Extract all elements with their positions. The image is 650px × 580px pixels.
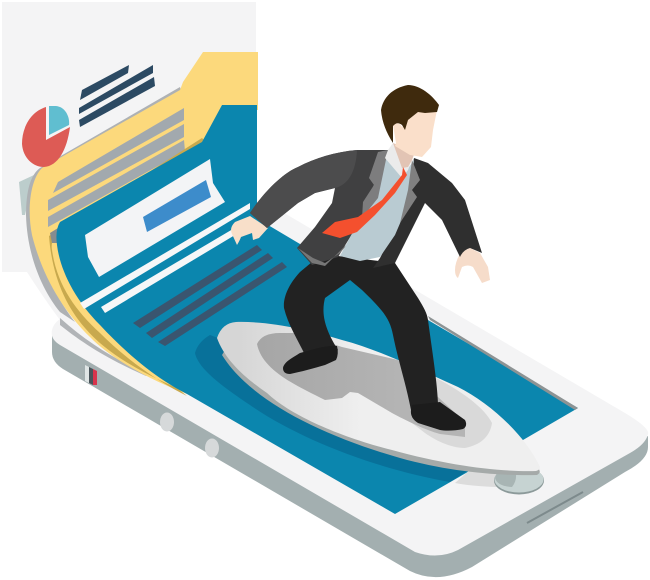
yellow folder	[30, 52, 256, 394]
blue button	[143, 180, 211, 232]
pie chart icon	[22, 106, 70, 167]
panel: light curled page sheet	[2, 2, 256, 396]
blue pie slice	[49, 106, 69, 135]
folder with yellow back	[19, 52, 258, 396]
board deck	[217, 322, 540, 471]
neck	[393, 143, 415, 168]
face	[395, 110, 437, 157]
collar	[385, 143, 412, 178]
right lapel	[400, 160, 420, 223]
dark bars on page	[133, 245, 287, 346]
hair	[381, 85, 439, 143]
grey inner screen edge	[428, 316, 578, 410]
phone side wall	[52, 335, 648, 577]
ear	[393, 123, 405, 145]
tie	[322, 167, 407, 238]
surfboard shadow on phone	[455, 468, 530, 487]
jacket left arm and body	[250, 150, 388, 265]
surfboard shadow on screen	[195, 335, 472, 482]
left hand	[231, 216, 268, 245]
red pie slice	[22, 107, 70, 167]
left lapel	[362, 150, 388, 218]
phone top surface	[52, 200, 648, 556]
left shoe	[283, 346, 338, 374]
businessman	[231, 85, 490, 431]
side button 1	[160, 412, 174, 432]
white lines on page	[80, 203, 250, 313]
right shoe	[411, 402, 466, 431]
right hand	[455, 248, 490, 283]
home button	[494, 466, 544, 494]
grey stripes on folder	[48, 108, 185, 227]
shirt	[340, 157, 414, 261]
dark text lines	[79, 65, 155, 127]
folder side tab teal	[19, 175, 34, 215]
jacket hem	[298, 238, 353, 266]
jacket right side	[373, 158, 482, 268]
grey edge shadow of page	[60, 318, 152, 376]
phone body	[52, 200, 648, 577]
surfboard	[217, 322, 540, 475]
sim slot	[85, 365, 97, 385]
pants	[284, 256, 438, 410]
board rim	[222, 350, 540, 475]
folder grey rim	[26, 87, 182, 322]
panel: blue screen and page	[56, 105, 578, 514]
speaker slot	[527, 492, 583, 523]
foot shadow inner	[257, 333, 465, 437]
white card on page	[85, 159, 225, 277]
grey corner tab	[50, 228, 58, 243]
side button 2	[205, 438, 219, 458]
gold edge under blue page	[49, 138, 206, 396]
foot shadow outer	[395, 361, 492, 448]
left sleeve light	[250, 150, 357, 228]
